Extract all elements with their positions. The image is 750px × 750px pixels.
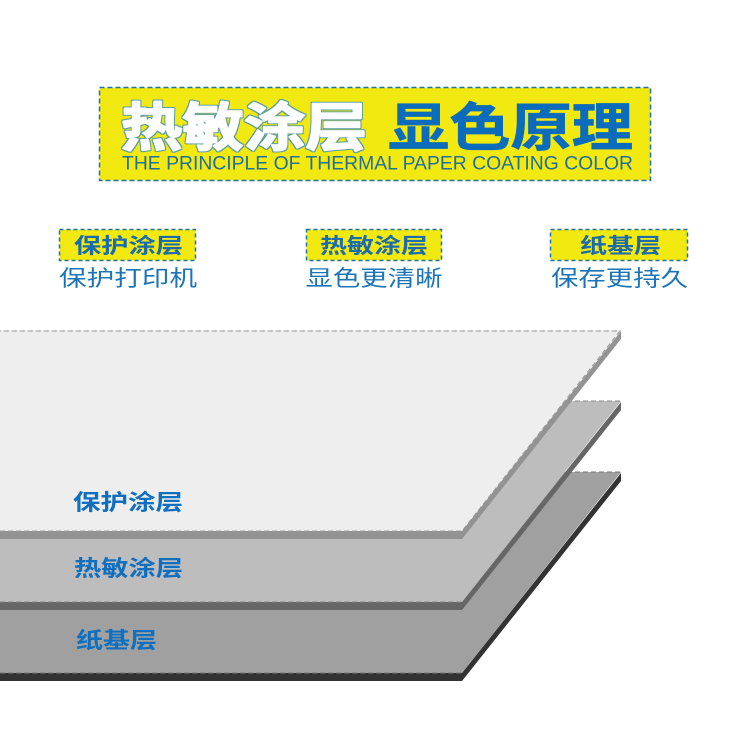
feature: protective coating [59, 230, 197, 291]
layer: thermal coating [0, 401, 621, 610]
feature: thermal coating: 热敏涂层 [320, 234, 428, 258]
layer diagram [0, 330, 621, 681]
label: paper base: 纸基层 [76, 628, 157, 653]
label: protective coating: 保护涂层 [73, 490, 183, 515]
title: color principle (blue): 显色原理 [388, 100, 633, 158]
label: thermal coating: 热敏涂层 [74, 556, 183, 581]
feature: paper base layer: 纸基层 [580, 235, 661, 258]
layer: paper base [0, 472, 621, 681]
feature: paper base layer [550, 230, 688, 291]
feature: paper base layer: 保存更持久 [551, 266, 688, 291]
feature: thermal coating: 显色更清晰 [306, 266, 442, 291]
feature: thermal coating [306, 230, 442, 291]
feature: protective coating: 保护涂层 [74, 234, 183, 258]
layer: protective coating [0, 330, 621, 539]
title banner [100, 88, 650, 180]
title: English subtitle: THE PRINCIPLE OF THERMAL PAPER COATING COLOR [122, 154, 633, 174]
feature: protective coating: 保护打印机 [59, 266, 197, 291]
title: thermal coating (white): 热敏涂层 [121, 100, 367, 158]
